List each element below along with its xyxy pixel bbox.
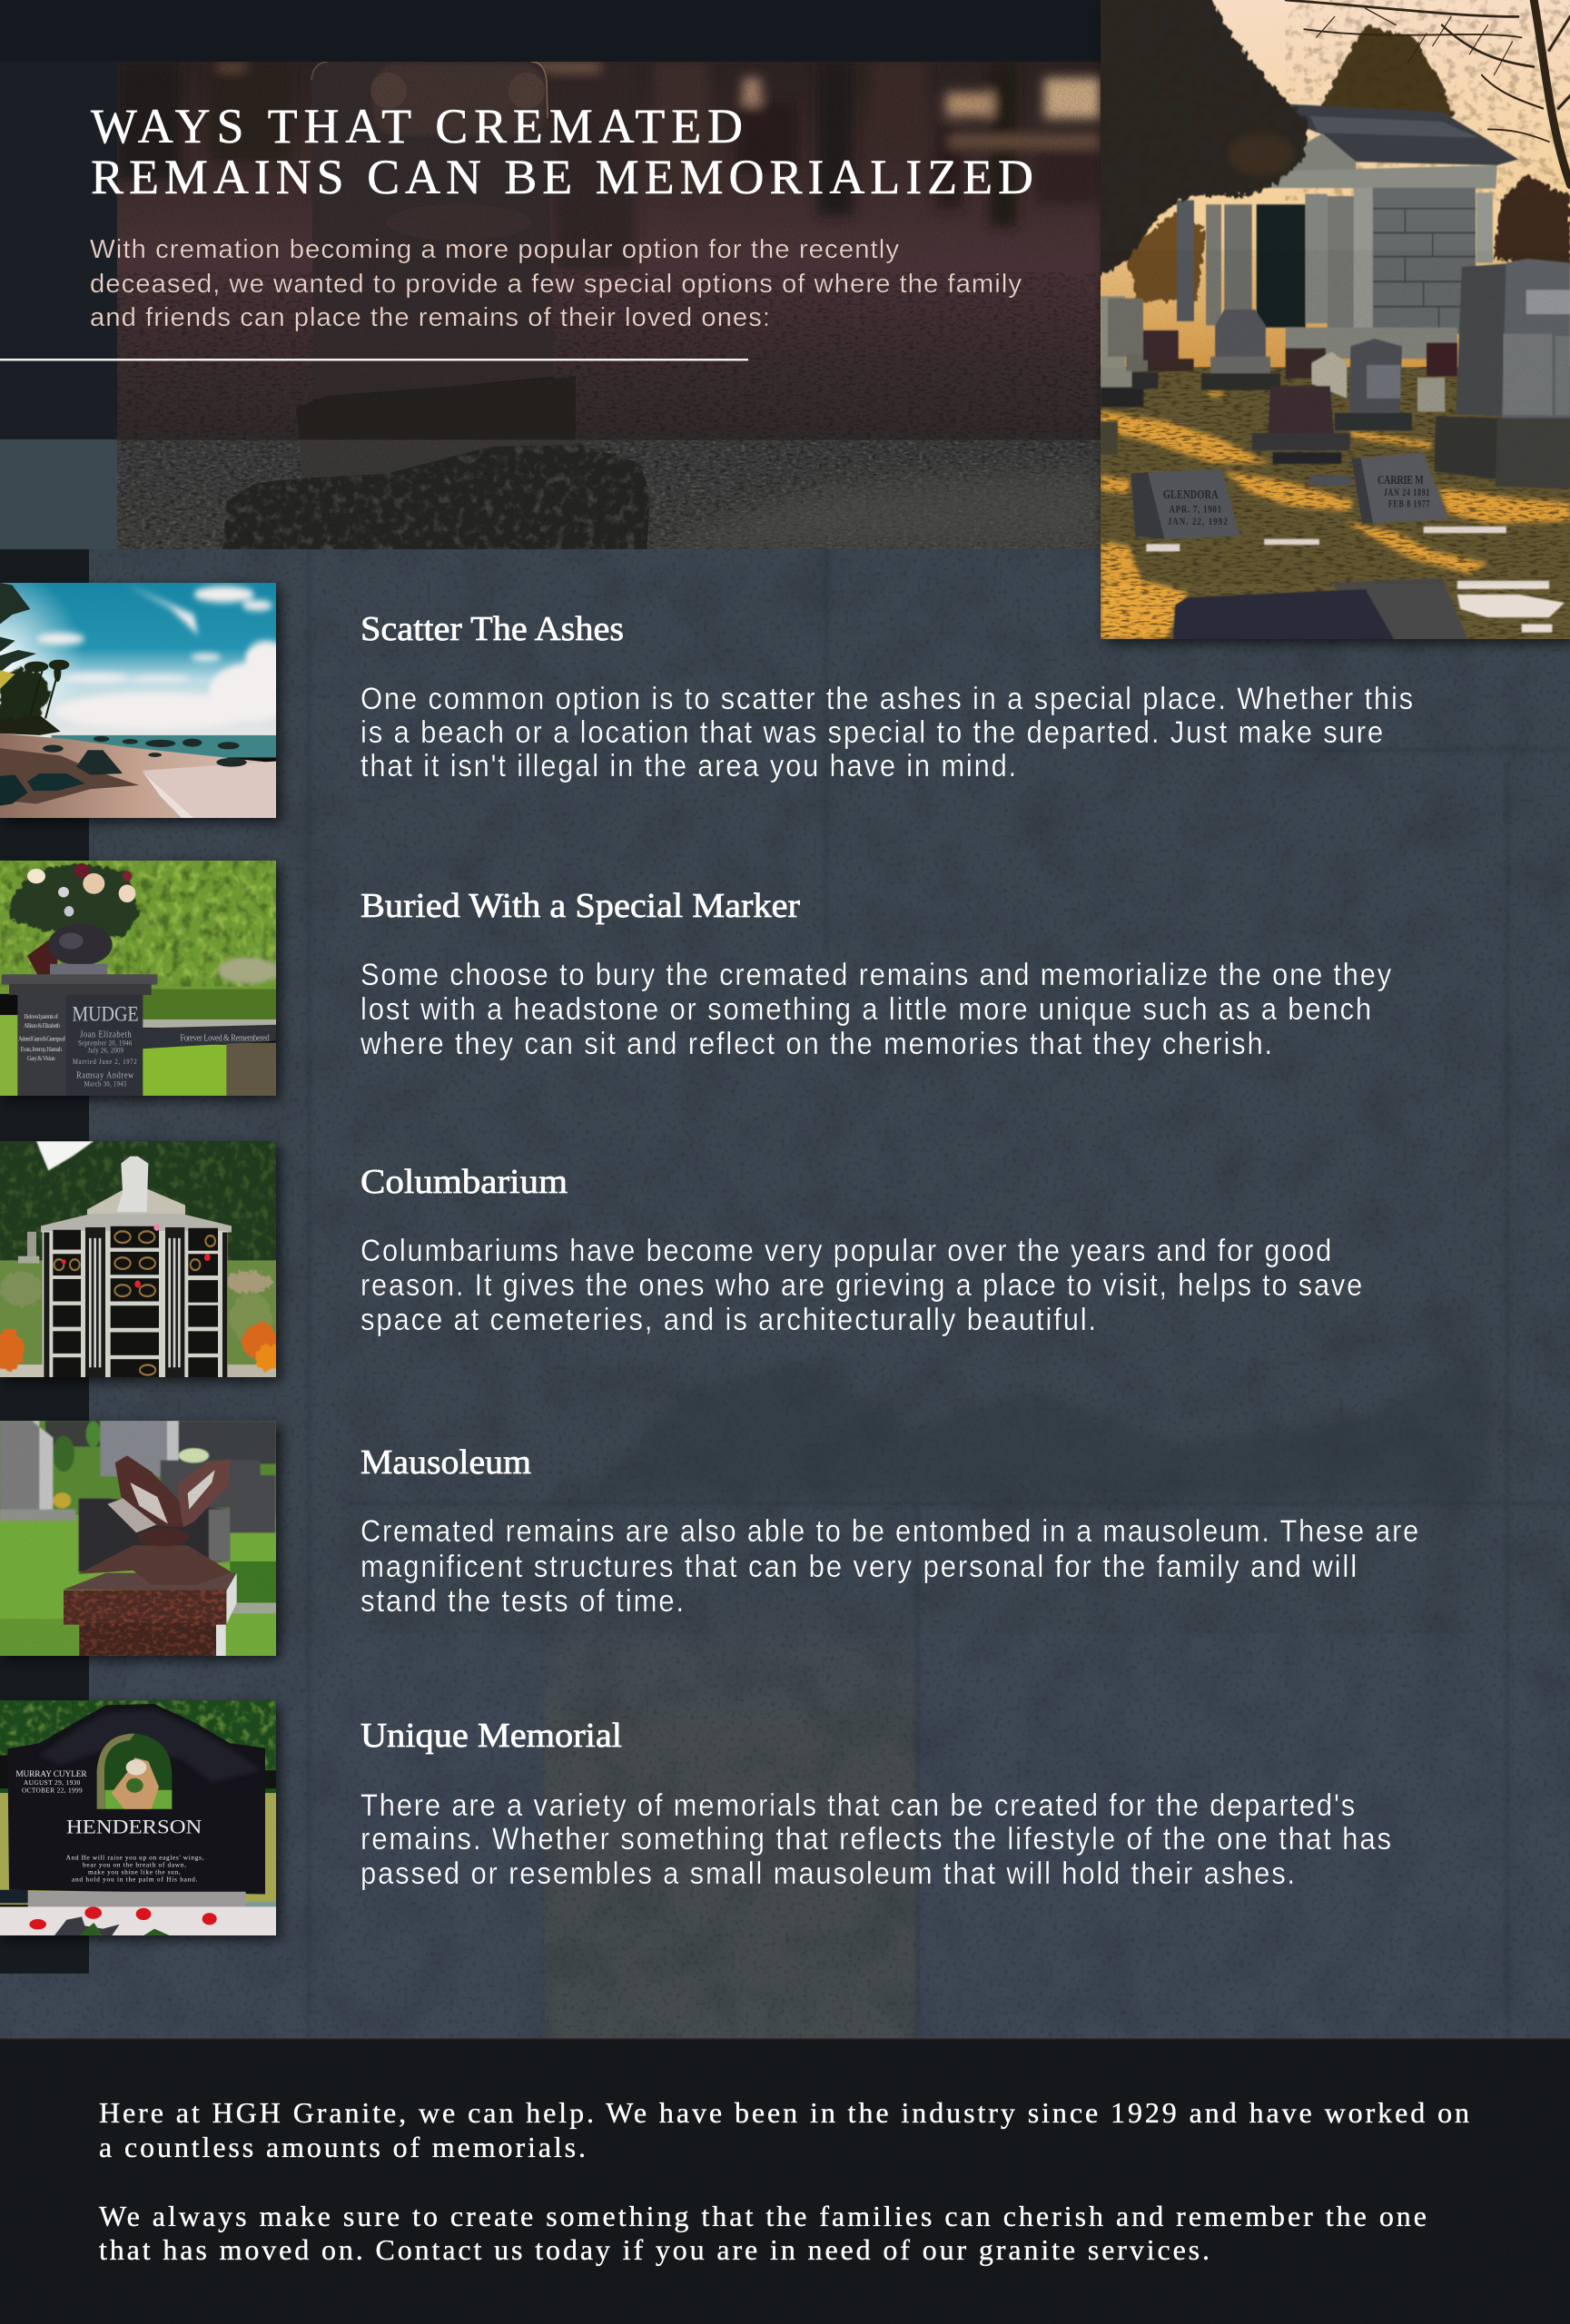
description: Columbariums have become very popular over the years and for good (360, 1234, 1333, 1268)
granite urn (48, 924, 113, 975)
description: reason. It gives the ones who are grieving a place to visit, helps to save (360, 1268, 1364, 1303)
white granite ledge with geraniums (0, 1906, 276, 1935)
snow patches (1146, 527, 1565, 633)
inscriptions: OCTOBER 22, 1999 (22, 1787, 83, 1795)
inscriptions (15, 1770, 204, 1883)
inscriptions: make you shine like the sun, (88, 1868, 181, 1876)
thumbnail shadow (0, 583, 276, 818)
description (360, 1788, 1393, 1891)
photo: Henderson headstone (0, 1700, 276, 1935)
footer text (99, 2096, 1469, 2266)
lawn shadow tufts (1101, 367, 1570, 643)
lawn (143, 990, 276, 1022)
background headstones (1101, 296, 1457, 486)
heading: Unique Memorial (360, 1717, 622, 1755)
roof and angel statue (41, 1157, 232, 1233)
photo: columbarium building (0, 1141, 276, 1377)
pedestal with inscription: MUDGE (72, 1002, 139, 1026)
photo: granite pedestal, urn and bench (0, 861, 276, 1096)
blurred background stones (0, 1421, 276, 1572)
large family headstone (1435, 259, 1570, 489)
description: where they can sit and reflect on the memories that they cherish. (360, 1027, 1274, 1061)
inscriptions: HENDERSON (66, 1815, 202, 1837)
flat marker: Glendora: GLENDORA (1163, 487, 1219, 502)
orange mums (0, 1324, 280, 1372)
description: There are a variety of memorials that can be created for the departed's (360, 1788, 1357, 1823)
pedestal with inscription: September 20, 1946 (78, 1039, 133, 1048)
bench (136, 1019, 276, 1096)
pedestal with inscription: March 30, 1945 (84, 1079, 127, 1088)
description: stand the tests of time. (360, 1584, 686, 1619)
item 4: mausoleum (0, 1421, 1420, 1656)
title (91, 99, 1033, 204)
bronze wreaths (54, 1231, 215, 1375)
flat marker: Glendora: APR. 7, 1901 (1170, 504, 1221, 516)
flat marker: Carrie: JAN 24 1891 (1384, 487, 1430, 498)
inscriptions: and hold you in the palm of His hand. (72, 1875, 198, 1883)
item 1: scatter the ashes (0, 583, 1415, 818)
pedestal with inscription: Ramsay Andrew (76, 1070, 133, 1081)
heading: Scatter The Ashes (360, 610, 624, 648)
photo shadow: cemetery (1101, 0, 1570, 639)
description: is a beach or a location that was special to the departed. Just make sure (360, 715, 1385, 750)
description: Some choose to bury the cremated remains and memorialize the one they (360, 958, 1393, 992)
item 3: columbarium (0, 1141, 1364, 1377)
clouds (36, 585, 293, 730)
flowers (62, 1224, 211, 1287)
description (360, 1234, 1364, 1337)
flat marker: Glendora: JAN. 22, 1992 (1168, 517, 1228, 528)
description: magnificent structures that can be very personal for the family and will (360, 1550, 1358, 1584)
butterfly (107, 1455, 230, 1546)
title: REMAINS CAN BE MEMORIALIZED (91, 150, 1033, 204)
thumbnail shadow (0, 861, 276, 1096)
description (360, 682, 1415, 783)
photo: granite butterfly memorial (0, 1421, 276, 1656)
pedestal with inscription: Adored Gram & Grampa of (18, 1035, 66, 1043)
sea (52, 735, 276, 757)
inscriptions: AUGUST 29, 1930 (24, 1778, 81, 1787)
mausoleum (1177, 103, 1518, 359)
pedestal with inscription: Beloved parents of (25, 1013, 59, 1020)
background trees (1126, 25, 1570, 300)
bare branches (1286, 0, 1570, 183)
blurred foreground stones (1173, 578, 1469, 643)
sunset sky (1101, 0, 1570, 376)
intro paragraph: deceased, we wanted to provide a few special options of where the family (90, 270, 1022, 299)
twiggy canopy shading (1286, 0, 1570, 201)
footer text: Here at HGH Granite, we can help. We have been in the industry since 1929 and have worked on (99, 2096, 1469, 2129)
intro paragraph: With cremation becoming a more popular option for the recently (90, 235, 900, 264)
description: Cremated remains are also able to be entombed in a mausoleum. These are (360, 1514, 1420, 1549)
flat marker: Carrie (1351, 453, 1448, 524)
thumbnail shadow (0, 1421, 276, 1656)
heading: Columbarium (360, 1163, 568, 1201)
item 5: unique memorial (0, 1700, 1393, 1935)
footer text: that has moved on. Contact us today if you are in need of our granite services. (99, 2233, 1210, 2266)
dark tufted lawn (117, 272, 1101, 439)
dark strip behind thumbnails (0, 549, 89, 1974)
pedestal with inscription (2, 974, 157, 1096)
pedestal with inscription: Joan Elizabeth (80, 1029, 132, 1040)
flat marker: Glendora (1131, 469, 1240, 539)
bench: Forever Loved & Remembered (180, 1033, 270, 1044)
top dark bar (0, 0, 1101, 62)
footer text: We always make sure to create something that the families can cherish and remember the one (99, 2200, 1427, 2232)
granite frame (43, 1231, 228, 1377)
base (28, 1892, 246, 1908)
description: that it isn't illegal in the area you have in mind. (360, 749, 1018, 783)
pedestal with inscription: July 26, 2009 (88, 1046, 123, 1055)
thumbnail shadow (0, 1700, 276, 1935)
photo: mausoleum and headstones at sunset (1101, 0, 1570, 639)
description: lost with a headstone or something a little more unique such as a bench (360, 992, 1373, 1027)
flower arrangement (9, 863, 139, 978)
description: remains. Whether something that reflects the lifestyle of the one that has (360, 1822, 1393, 1856)
pedestal with inscription: Gary & Vivian (27, 1054, 55, 1062)
headstone (296, 62, 578, 481)
golden sunlit streaks (1101, 390, 1570, 639)
mossy rock base (222, 445, 650, 554)
beach rocks (0, 736, 247, 806)
pedestal with inscription: Evan, Jeremy, Hannah (21, 1045, 62, 1053)
inscriptions: MURRAY CUYLER (15, 1770, 87, 1779)
pedestal with inscription: Married June 2, 1972 (73, 1057, 137, 1066)
footer panel (0, 2038, 1570, 2324)
description: One common option is to scatter the ashes in a special place. Whether this (360, 682, 1415, 716)
pedestal with inscription: Allison & Elizabeth (24, 1021, 60, 1029)
inscriptions: And He will raise you up on eagles' wings, (66, 1854, 204, 1862)
arched niche with bronze sculpture (97, 1734, 172, 1809)
intro paragraph: and friends can place the remains of their loved ones: (90, 303, 771, 332)
left dark bar beside header (0, 62, 117, 439)
intro paragraph (90, 235, 1022, 332)
granite leaves (78, 1545, 232, 1585)
cedar tree (1096, 0, 1308, 280)
heading: Buried With a Special Marker (360, 887, 800, 925)
block pedestal (64, 1573, 237, 1656)
foliage (0, 1700, 276, 1773)
lawn (1101, 367, 1570, 643)
foliage (0, 861, 276, 987)
flat marker: Carrie: FEB 8 1977 (1388, 498, 1430, 510)
tint edge (117, 439, 1101, 440)
header photo: tinted headstone in a cemetery (117, 62, 1101, 549)
header rule (0, 359, 748, 361)
description: passed or resembles a small mausoleum that will hold their ashes. (360, 1856, 1297, 1891)
niche panels (53, 1226, 218, 1377)
description: space at cemeteries, and is architecturally beautiful. (360, 1303, 1098, 1337)
heading: Mausoleum (360, 1443, 531, 1482)
black granite stone (7, 1704, 265, 1894)
title: WAYS THAT CREMATED (91, 99, 743, 153)
description (360, 1514, 1420, 1619)
inscriptions: bear you on the breath of dawn, (83, 1861, 186, 1869)
item 2: buried with a special marker (0, 861, 1393, 1096)
blurred background headstones (117, 62, 1101, 271)
flat marker: Carrie: CARRIE M (1377, 473, 1424, 487)
thumbnail shadow (0, 1141, 276, 1377)
footer text: a countless amounts of memorials. (99, 2131, 586, 2163)
photo: beach with palm trees (0, 583, 276, 818)
description (360, 958, 1393, 1061)
flutes (89, 1238, 181, 1367)
palm trees (0, 583, 69, 735)
sand (0, 734, 276, 818)
